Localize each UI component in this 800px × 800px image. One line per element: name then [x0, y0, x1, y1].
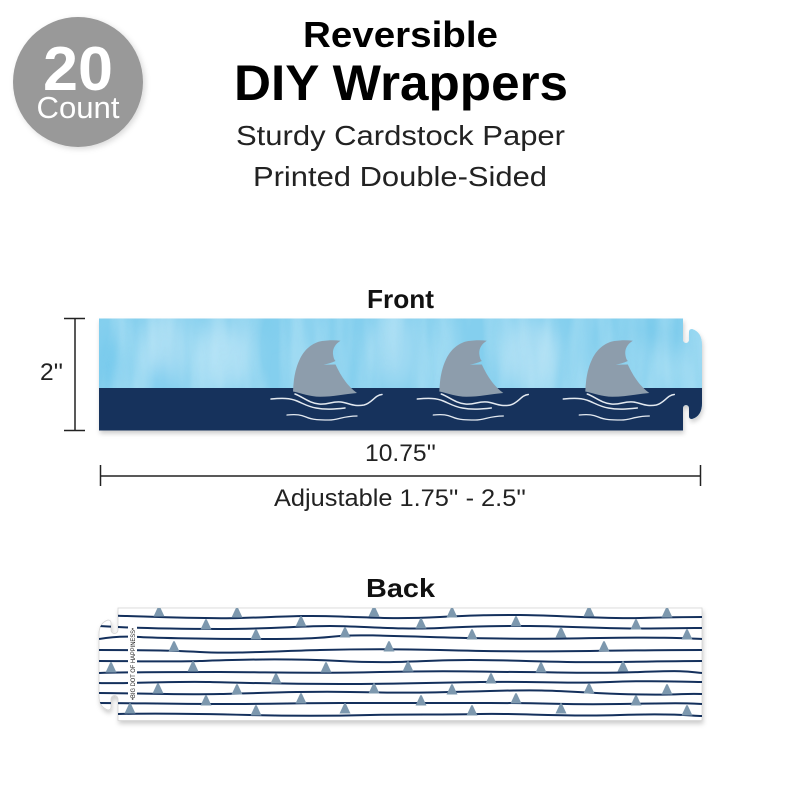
title: Reversible — [303, 14, 498, 55]
heading: back: Back — [366, 573, 436, 603]
title — [234, 14, 568, 111]
height label: 2'' — [40, 359, 63, 386]
subtitle: Printed Double-Sided — [253, 161, 547, 192]
fin triangles — [106, 606, 692, 716]
subtitle: Sturdy Cardstock Paper — [236, 120, 565, 151]
count badge — [13, 17, 143, 147]
length dimension — [100, 465, 700, 486]
back wrapper strip — [99, 606, 702, 720]
heading: front: Front — [367, 284, 434, 314]
adjustable label: Adjustable 1.75'' - 2.5'' — [274, 485, 526, 512]
title: DIY Wrappers — [234, 55, 568, 111]
length label: 10.75'' — [365, 440, 436, 467]
count badge: 20 — [43, 35, 113, 104]
shark fin 3 — [563, 340, 674, 420]
brand imprint: •BIG DOT OF HAPPINESS• — [131, 628, 137, 700]
shark fin 2 — [417, 340, 528, 420]
shark fin 1 — [271, 340, 382, 420]
count badge: Count — [36, 90, 120, 125]
front wrapper strip — [95, 310, 707, 435]
height dimension — [64, 318, 85, 430]
subtitle — [236, 120, 565, 192]
wavy lines — [99, 615, 702, 716]
brand imprint — [128, 626, 137, 702]
